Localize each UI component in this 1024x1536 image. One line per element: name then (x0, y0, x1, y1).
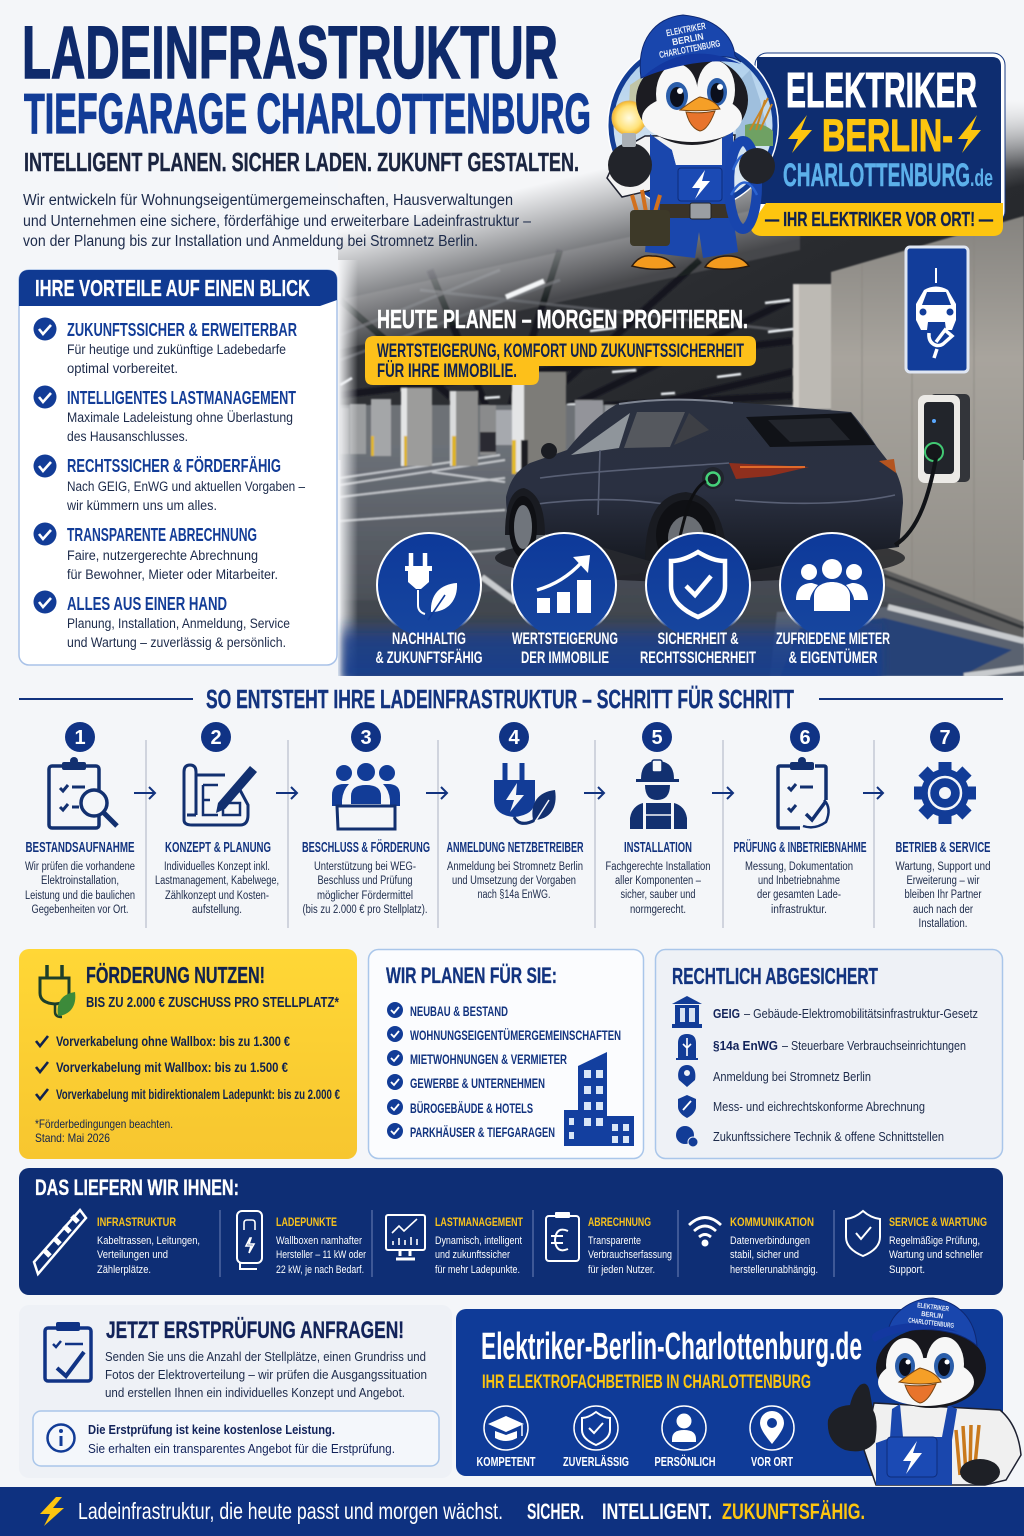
benefit: billing: TRANSPARENTE ABRECHNUNG (67, 525, 257, 545)
step 5: sicher, sauber und (620, 889, 696, 901)
car: dark SUV (495, 399, 905, 582)
item: infrastructure: Verteilungen und (97, 1249, 168, 1261)
step 2 (155, 722, 279, 916)
benefit: future proof (34, 318, 297, 376)
badge: value increase: DER IMMOBILIE (521, 649, 609, 667)
badge: safety: RECHTSSICHERHEIT (640, 649, 756, 667)
icon: reliable (563, 1406, 629, 1469)
panel: initial check request: und erstellen Ihnen ein individuelles Konzept und Angebot. (105, 1385, 405, 1400)
step 1: 1 (74, 727, 86, 749)
parking sign (906, 247, 968, 372)
step 6: der gesamten Lade- (757, 889, 841, 901)
step 1: BESTANDSAUFNAHME (26, 840, 135, 856)
panel: target groups: NEUBAU & BESTAND (410, 1004, 508, 1019)
step 1: Leistung und die baulichen (25, 890, 135, 902)
item: service: Regelmäßige Prüfung, (889, 1235, 980, 1247)
panel: legal: §14a EnWG (713, 1038, 778, 1053)
icon: lightning bolt (40, 1497, 64, 1526)
panel: deliverables: DAS LIEFERN WIR IHNEN: (35, 1175, 239, 1200)
benefit: one stop: Planung, Installation, Anmeldung, Service (67, 616, 290, 631)
step 1: Gegebenheiten vor Ort. (32, 904, 128, 916)
icon: clipboard check (45, 1322, 91, 1381)
footer bar: Ladeinfrastruktur, die heute passt und morgen wächst. (78, 1498, 503, 1524)
photo headline: HEUTE PLANEN – MORGEN PROFITIEREN. (377, 304, 748, 334)
step 6: 6 (799, 727, 811, 749)
panel: funding: Vorverkabelung mit Wallbox: bis zu 1.500 € (56, 1060, 288, 1075)
step 3: 3 (360, 727, 372, 749)
item: billing: ABRECHNUNG (588, 1215, 651, 1229)
panel: legal (656, 950, 1002, 1158)
item: communication: stabil, sicher und (730, 1249, 799, 1261)
benefit: future proof: ZUKUNFTSSICHER & ERWEITERBAR (67, 320, 297, 340)
panel: legal: Zukunftssichere Technik & offene Schnittstellen (713, 1130, 944, 1144)
item: infrastructure: Zählerplätze. (97, 1264, 151, 1276)
step 7: 7 (939, 727, 951, 749)
benefit: one stop: und Wartung – zuverlässig & persönlich. (67, 635, 286, 650)
badge: satisfied tenants: & EIGENTÜMER (788, 648, 878, 667)
step 7: Installation. (918, 918, 968, 930)
step 1 (25, 722, 135, 916)
item: load management: und zukunftssicher (435, 1249, 510, 1261)
item: charging points (237, 1211, 366, 1276)
item: billing: für jeden Nutzer. (588, 1264, 655, 1276)
step 3: Beschluss und Prüfung (318, 875, 412, 887)
item: communication: Datenverbindungen (730, 1235, 810, 1247)
icon: competent (476, 1406, 536, 1469)
arrow (584, 787, 604, 799)
step 1: Elektroinstallation, (41, 875, 119, 887)
badge: safety: SICHERHEIT & (658, 630, 739, 648)
title: LADEINFRASTRUKTUR (22, 11, 558, 94)
benefit: future proof: Für heutige und zukünftige Ladebedarfe (67, 342, 286, 357)
panel: target groups: WOHNUNGSEIGENTÜMERGEMEINSCHAFTEN (410, 1028, 621, 1043)
arrow (276, 787, 297, 799)
badge: sustainable: & ZUKUNFTSFÄHIG (376, 649, 482, 667)
footer bar: SICHER. (527, 1499, 584, 1524)
item: charging points: Wallboxen namhafter (276, 1235, 362, 1247)
item: billing: Transparente (588, 1235, 641, 1247)
step 7: bleiben Ihr Partner (904, 889, 982, 901)
panel: legal: RECHTLICH ABGESICHERT (672, 963, 878, 989)
photo callout: FÜR IHRE IMMOBILIE. (377, 361, 517, 382)
icon: plug with leaf (40, 965, 75, 1017)
panel: target groups: MIETWOHNUNGEN & VERMIETER (410, 1052, 567, 1067)
step 7: Wartung, Support und (896, 861, 990, 873)
panel: initial check request: JETZT ERSTPRÜFUNG ANFRAGEN! (106, 1317, 404, 1344)
wallbox (895, 394, 970, 545)
step 2: 2 (210, 727, 222, 749)
benefit: legal and funding: RECHTSSICHER & FÖRDERFÄHIG (67, 456, 281, 476)
item: service (846, 1211, 987, 1276)
logo: mascot penguin with bulb (607, 15, 779, 269)
logo: company name banner: .de (970, 165, 993, 192)
benefit: legal and funding: Nach GEIG, EnWG und aktuellen Vorgaben – (67, 479, 305, 494)
icon: tech gear (676, 1126, 698, 1147)
panel: funding: Stand: Mai 2026 (35, 1131, 110, 1145)
benefit: future proof: optimal vorbereitet. (67, 361, 178, 376)
step 4 (446, 722, 584, 901)
benefit: one stop (34, 590, 290, 650)
note box (33, 1411, 439, 1466)
step 7 (896, 722, 991, 930)
panel: target groups: GEWERBE & UNTERNEHMEN (410, 1076, 545, 1091)
logo: mascot penguin with bulb: BERLIN (671, 31, 705, 48)
item: load management: LASTMANAGEMENT (435, 1215, 523, 1229)
mascot: penguin thumbs up (828, 1298, 1021, 1485)
item: charging points: 22 kW, je nach Bedarf. (276, 1264, 364, 1276)
step 5 (606, 722, 710, 916)
note box: Die Erstprüfung ist keine kostenlose Leistung. (88, 1422, 335, 1437)
item: service: Wartung und schneller (889, 1249, 983, 1261)
panel: funding: Vorverkabelung ohne Wallbox: bis zu 1.300 € (56, 1034, 290, 1049)
intro text: von der Planung bis zur Installation und Anmeldung bei Stromnetz Berlin. (23, 233, 478, 250)
icon: reliable: ZUVERLÄSSIG (563, 1454, 629, 1469)
intro text: und Unternehmen eine sichere, förderfähige und erweiterbare Ladeinfrastruktur – (23, 213, 531, 230)
step 1: Wir prüfen die vorhandene (25, 861, 135, 873)
step 2: Individuelles Konzept inkl. (164, 861, 270, 873)
icon: personal: PERSÖNLICH (654, 1454, 716, 1469)
footer bar: INTELLIGENT. (602, 1499, 712, 1524)
item: load management: für mehr Ladepunkte. (435, 1264, 520, 1276)
step 3: möglicher Fördermittel (317, 890, 413, 902)
icon: competent: KOMPETENT (476, 1455, 536, 1469)
item: service: Support. (889, 1264, 925, 1276)
step 2: KONZEPT & PLANUNG (165, 840, 271, 856)
footer bar (0, 1487, 1024, 1536)
badge: satisfied tenants: ZUFRIEDENE MIETER (776, 630, 890, 648)
step 6: und Inbetriebnahme (758, 875, 840, 887)
item: billing (546, 1212, 672, 1276)
item: load management (386, 1215, 523, 1276)
arrow (712, 787, 733, 799)
benefit: one stop: ALLES AUS EINER HAND (67, 594, 227, 614)
item: infrastructure: Kabeltrassen, Leitungen, (97, 1235, 200, 1247)
panel: website contact: IHR ELEKTROFACHBETRIEB IN CHARLOTTENBURG (482, 1372, 811, 1393)
benefit: legal and funding (34, 454, 305, 513)
step 5: Fachgerechte Installation (606, 861, 710, 873)
badge: satisfied tenants (776, 533, 890, 667)
step 4: nach §14a EnWG. (478, 889, 550, 901)
icon: personal (654, 1406, 716, 1469)
panel: target groups (368, 950, 644, 1158)
badge: sustainable: NACHHALTIG (392, 630, 466, 648)
step 3: BESCHLUSS & FÖRDERUNG (302, 839, 430, 856)
icon: registration pin (678, 1065, 695, 1087)
photo callout (365, 336, 756, 385)
item: infrastructure: INFRASTRUKTUR (97, 1215, 176, 1229)
step 4: 4 (508, 727, 520, 749)
panel: funding: Vorverkabelung mit bidirektionalem Ladepunkt: bis zu 2.000 € (56, 1087, 340, 1102)
panel: funding: BIS ZU 2.000 € ZUSCHUSS PRO STELLPLATZ* (86, 994, 339, 1011)
mascot: penguin thumbs up: CHARLOTTENBURG (908, 1317, 955, 1330)
arrow (134, 787, 155, 799)
subtitle: TIEFGARAGE CHARLOTTENBURG (24, 82, 591, 146)
icon: office building (564, 1052, 634, 1146)
benefit: billing (34, 522, 278, 582)
panel: website contact (456, 1309, 1003, 1476)
panel: funding (19, 949, 357, 1159)
panel: target groups: BÜROGEBÄUDE & HOTELS (410, 1101, 533, 1116)
benefit: billing: für Bewohner, Mieter oder Mitarbeiter. (67, 567, 278, 582)
benefit: load management: Maximale Ladeleistung ohne Überlastung (67, 410, 293, 425)
panel: target groups: WIR PLANEN FÜR SIE: (386, 963, 557, 988)
step 3: Unterstützung bei WEG- (314, 861, 416, 873)
badge: sustainable (376, 533, 482, 667)
panel: funding: *Förderbedingungen beachten. (35, 1117, 173, 1131)
item: billing: Verbrauchserfassung (588, 1249, 672, 1261)
badge: safety (640, 533, 756, 667)
arrow (426, 787, 447, 799)
step 2: Lastmanagement, Kabelwege, (155, 875, 279, 887)
panel: initial check request: Fotos der Elektroverteilung – wir prüfen die Ausgangssituation (105, 1367, 427, 1382)
logo: company name banner (750, 53, 1005, 236)
step 4: und Umsetzung der Vorgaben (452, 875, 576, 887)
note box: Sie erhalten ein transparentes Angebot für die Erstprüfung. (88, 1441, 395, 1456)
item: charging points: LADEPUNKTE (276, 1215, 337, 1229)
panel: legal: Mess- und eichrechtskonforme Abrechnung (713, 1100, 925, 1114)
step 7: auch nach der (913, 904, 973, 916)
mascot: penguin thumbs up: BERLIN (921, 1311, 943, 1321)
badge: value increase (512, 533, 618, 667)
benefit: billing: Faire, nutzergerechte Abrechnung (67, 548, 258, 563)
step 3: (bis zu 2.000 € pro Stellplatz). (302, 904, 428, 916)
logo: company name banner: BERLIN- (822, 110, 953, 161)
step 2: aufstellung. (192, 904, 242, 916)
step 4: Anmeldung bei Stromnetz Berlin (447, 861, 583, 873)
panel: legal: GEIG (713, 1006, 740, 1021)
arrow (863, 787, 883, 799)
step 7: Erweiterung – wir (906, 875, 980, 887)
step 6: PRÜFUNG & INBETRIEBNAHME (734, 839, 867, 856)
item: communication (689, 1215, 818, 1276)
icon: GEIG building (672, 996, 702, 1028)
panel: deliverables (19, 1168, 1003, 1295)
logo: mascot penguin with bulb: ELEKTRIKER (665, 21, 707, 39)
intro text (23, 192, 531, 250)
step 6 (734, 722, 867, 916)
benefit: load management: des Hausanschlusses. (67, 429, 188, 444)
item: communication: KOMMUNIKATION (730, 1215, 814, 1229)
item: communication: herstellerunabhängig. (730, 1264, 818, 1276)
icon: meter (676, 1034, 698, 1060)
benefit: legal and funding: wir kümmern uns um alles. (66, 498, 217, 513)
panel heading: IHRE VORTEILE AUF EINEN BLICK (35, 275, 310, 301)
step 3 (302, 722, 430, 916)
step 4: ANMELDUNG NETZBETREIBER (446, 840, 584, 856)
benefit: load management: INTELLIGENTES LASTMANAGEMENT (67, 388, 296, 408)
icon: shield (678, 1095, 696, 1118)
step 2: Zählkonzept und Kosten- (165, 890, 269, 902)
badge: value increase: WERTSTEIGERUNG (512, 630, 618, 648)
benefit: load management (34, 386, 296, 444)
intro text: Wir entwickeln für Wohnungseigentümergemeinschaften, Hausverwaltungen (23, 192, 513, 209)
panel: funding: FÖRDERUNG NUTZEN! (86, 962, 265, 988)
panel: initial check request (19, 1305, 452, 1478)
panel: benefits (19, 270, 337, 665)
step 5: normgerecht. (630, 904, 686, 916)
panel: initial check request: Senden Sie uns die Anzahl der Stellplätze, einen Grundriss und (105, 1349, 426, 1364)
item: load management: Dynamisch, intelligent (435, 1235, 522, 1247)
step 6: Messung, Dokumentation (745, 861, 853, 873)
step 6: infrastruktur. (771, 904, 827, 916)
icon: on site (750, 1406, 794, 1469)
panel: legal: Anmeldung bei Stromnetz Berlin (713, 1070, 871, 1084)
mascot: penguin thumbs up: ELEKTRIKER (917, 1302, 949, 1313)
photo callout: WERTSTEIGERUNG, KOMFORT UND ZUKUNFTSSICHERHEIT (377, 341, 744, 362)
panel: legal: – Steuerbare Verbrauchseinrichtungen (782, 1039, 966, 1053)
panel: target groups: PARKHÄUSER & TIEFGARAGEN (410, 1125, 555, 1140)
step 5: INSTALLATION (624, 840, 692, 856)
step 5: 5 (651, 727, 663, 749)
panel heading (19, 270, 337, 306)
tagline: INTELLIGENT PLANEN. SICHER LADEN. ZUKUNFT GESTALTEN. (24, 147, 579, 177)
photo: underground garage with charging EV (338, 100, 1024, 680)
item: service: SERVICE & WARTUNG (889, 1215, 987, 1229)
panel: legal: – Gebäude-Elektromobilitätsinfrastruktur-Gesetz (744, 1007, 978, 1021)
icon: on site: VOR ORT (751, 1455, 793, 1469)
item: infrastructure (34, 1210, 200, 1276)
item: charging points: Hersteller – 11 kW oder (276, 1249, 366, 1261)
step 5: aller Komponenten – (615, 875, 701, 887)
logo: mascot penguin with bulb: CHARLOTTENBURG (658, 38, 721, 61)
footer bar: ZUKUNFTSFÄHIG. (722, 1499, 865, 1524)
